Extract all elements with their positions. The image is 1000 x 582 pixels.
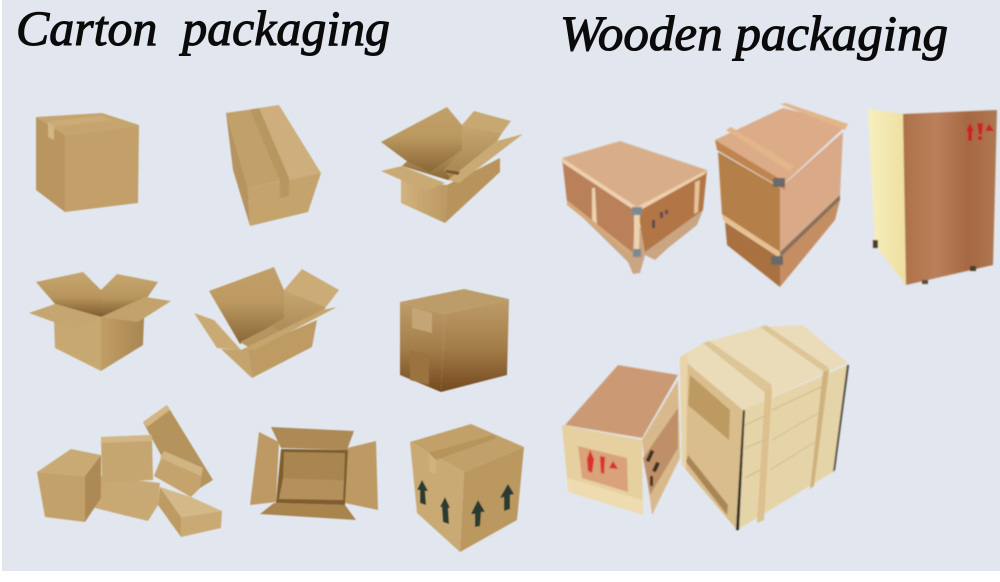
icon: red handling symbols <box>966 123 994 141</box>
icon: crate metal brackets <box>771 178 785 265</box>
crate: large slatted crate <box>680 325 849 530</box>
carton: open box 4 <box>29 272 171 371</box>
carton: dark closed box 6 <box>400 289 509 392</box>
crate: low pallet crate <box>562 141 707 274</box>
title: carton packaging: Carton packaging <box>16 0 390 56</box>
icon: red handling symbols <box>587 450 618 474</box>
crate: open small crate <box>562 365 680 515</box>
icon: crate handling marks <box>652 210 668 228</box>
title: wooden packaging: Wooden packaging <box>560 5 948 61</box>
carton: top-down open box <box>250 427 378 520</box>
carton: open box 5 <box>194 267 339 378</box>
panel: carton boxes <box>29 105 524 552</box>
carton: stacked boxes group <box>37 405 222 537</box>
carton: open box 3 <box>381 107 523 223</box>
carton: tall taped box 2 <box>226 105 321 226</box>
icon: black shipping marks <box>646 450 660 486</box>
carton: closed box 1 <box>36 113 139 212</box>
panel: wooden crates <box>562 103 997 530</box>
icon: crate corner brackets <box>632 207 642 257</box>
carton: box with arrow marks <box>410 424 524 552</box>
crate: plywood crate with red marks <box>868 109 997 285</box>
icon: up arrows <box>417 480 514 527</box>
crate: tall crate with slats <box>715 103 848 287</box>
